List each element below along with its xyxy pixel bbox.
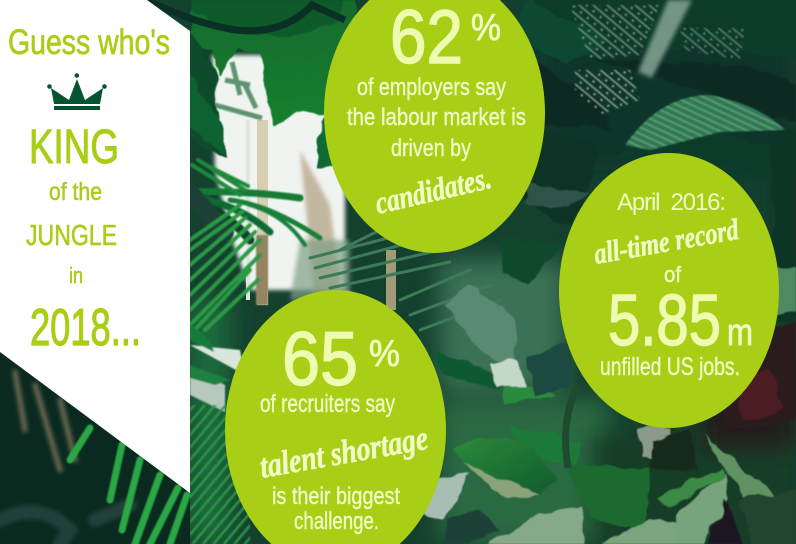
text: in: in (69, 263, 83, 288)
text: is their biggest challenge (272, 483, 400, 535)
callout: April 2016 record (559, 153, 779, 428)
callout: April 2016 record: m (727, 312, 753, 354)
stat: 65%: 65 (282, 317, 358, 402)
bamboo sprig in the window (215, 62, 262, 118)
text: employers statement: driven by (391, 135, 471, 162)
top big leaf and canopy (180, 0, 355, 168)
text: employers statement: the labour market is (347, 104, 526, 131)
text: employers statement: of employers say (357, 74, 506, 101)
trunk (257, 120, 268, 305)
lower right leaves (590, 265, 796, 544)
dark leaves top right (500, 0, 796, 320)
heading: KING: KING (29, 121, 119, 174)
big leaves lower centre (423, 285, 695, 544)
fronds behind lower callout (310, 230, 500, 330)
heading: 2018...: 2018... (30, 299, 141, 357)
text: employers statement (347, 74, 526, 162)
text: April 2016: April 2016: (617, 189, 726, 216)
stat: 5.85 m: 5.85 (608, 281, 721, 361)
palm frond left centre (186, 160, 320, 335)
text: of: of (664, 262, 682, 287)
text: of the: of the (49, 178, 102, 206)
callout: 65% of recruiters (225, 290, 446, 544)
text: is their biggest challenge: challenge. (294, 508, 379, 535)
icon: crown (47, 73, 107, 110)
palm detail top right (570, 5, 785, 150)
text: unfilled US jobs: unfilled US jobs. (600, 353, 740, 381)
bottom left dark foliage (0, 352, 190, 544)
script: all-time record: all-time record (591, 213, 742, 271)
dark vine (147, 0, 345, 31)
callout: 62% of employers: % (471, 7, 501, 48)
heading: JUNGLE: JUNGLE (26, 220, 117, 252)
lower left centre leaves (190, 325, 250, 544)
white title panel (0, 0, 190, 493)
blurred pale leaf top (638, 0, 692, 78)
callout: 62% of employers (324, 0, 545, 253)
conservatory window light (212, 55, 345, 290)
soft colour field (190, 0, 796, 544)
script: candidates: candidates. (371, 159, 495, 221)
stem (566, 385, 578, 468)
text: is their biggest challenge: is their biggest (272, 483, 400, 510)
text: of recruiters say: of recruiters say (260, 390, 395, 418)
heading: Guess who's: Guess who's (8, 23, 170, 62)
callout: 65% of recruiters: % (369, 333, 400, 374)
script: talent shortage: talent shortage (257, 420, 431, 486)
